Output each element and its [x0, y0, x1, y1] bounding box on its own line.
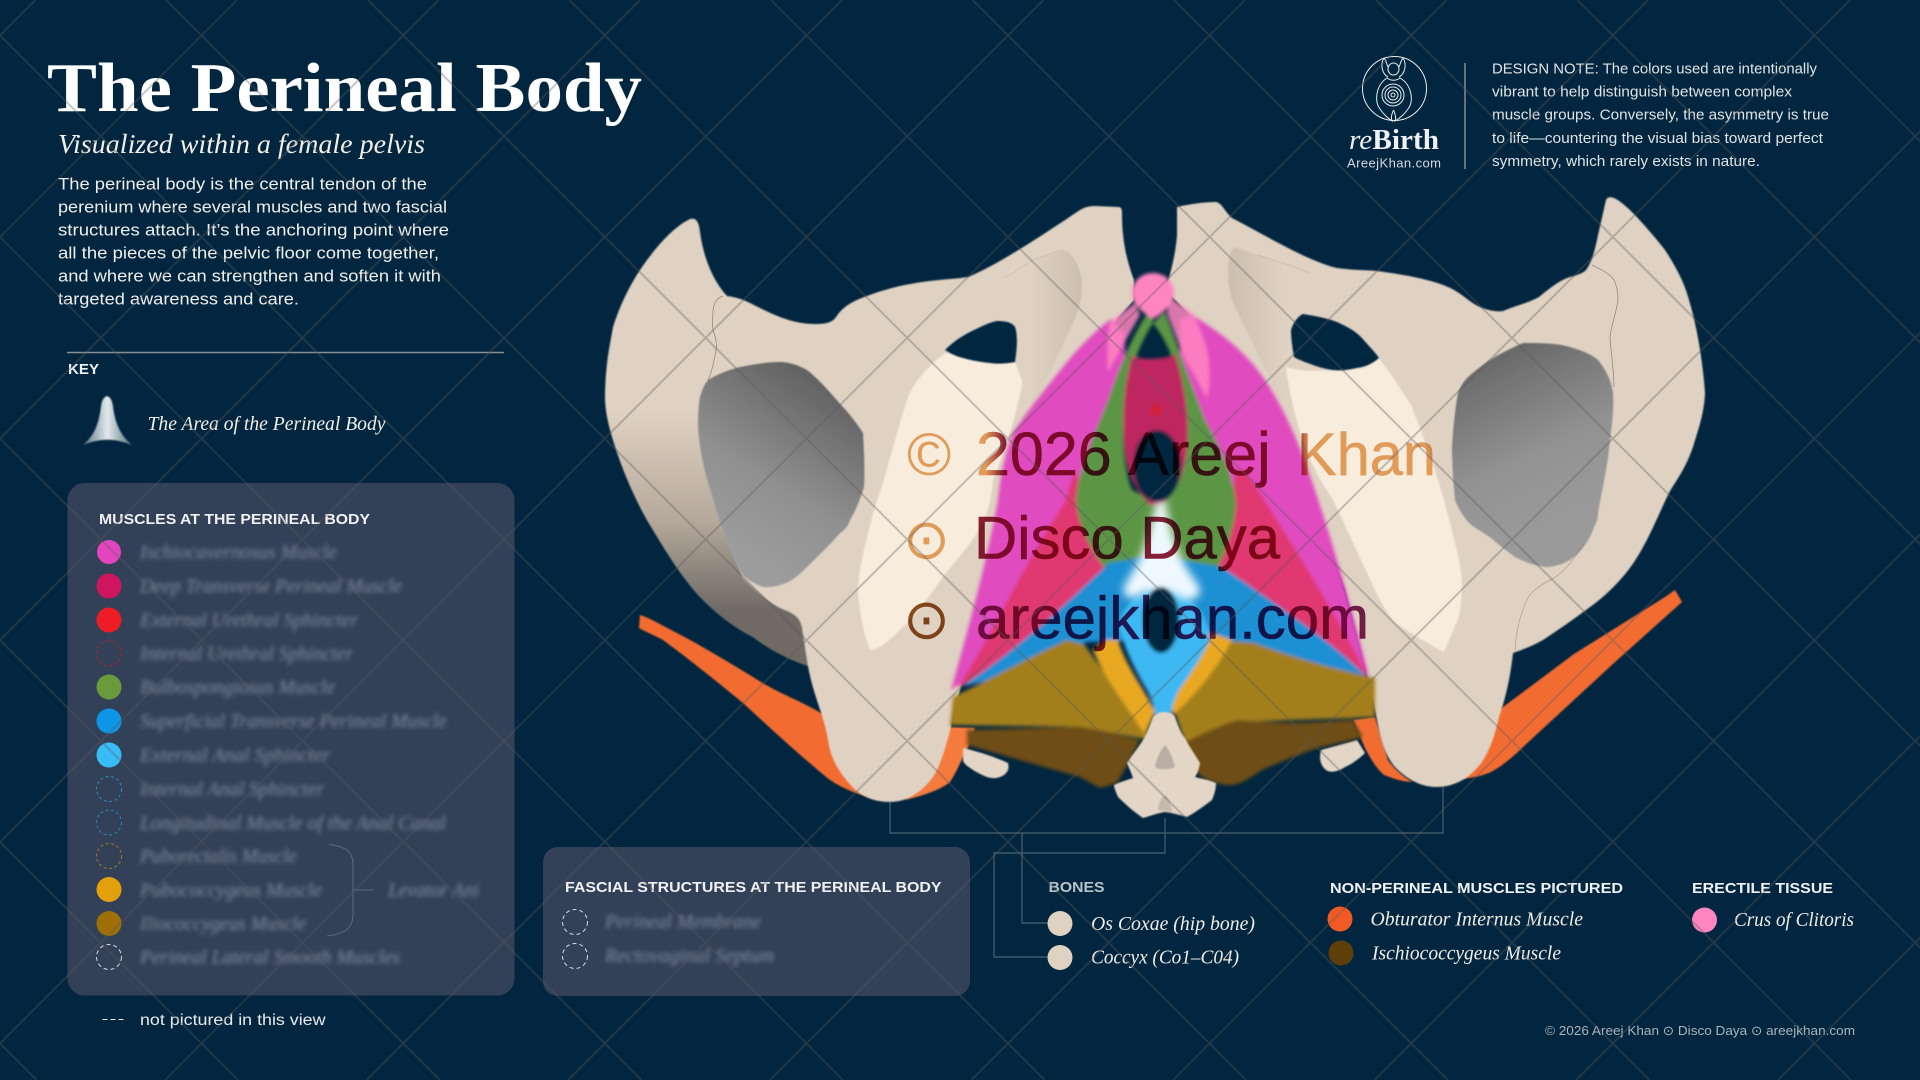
central deep transverse fibres — [1123, 354, 1188, 505]
title: The Perineal Body — [47, 50, 642, 127]
watermark — [903, 420, 1436, 652]
icon: perineal body area — [83, 396, 132, 445]
watermark line 3: ⊙ — [903, 588, 950, 652]
muscle names (obscured): Superficial Transverse Perineal Muscle — [140, 710, 447, 732]
fascial swatches — [562, 910, 588, 968]
muscle names (obscured): Perineal Lateral Smooth Muscles — [139, 946, 400, 968]
watermark line 1: 2026 Areej — [976, 420, 1271, 488]
obturator foramen holes — [945, 314, 1379, 370]
key section — [67, 352, 504, 445]
right ramus shading — [1228, 247, 1310, 440]
muscle names (obscured): Pubococcygeus Muscle — [139, 880, 322, 902]
watermark line 3: areejkhan.com — [976, 584, 1369, 652]
bone: right os coxae — [1165, 197, 1705, 787]
watermark line 1: © — [907, 421, 951, 488]
swatch: crus of clitoris — [1692, 908, 1717, 932]
thin contour lines on bones — [708, 250, 1618, 650]
obturator internus muscle: left — [639, 615, 975, 800]
subtitle: Visualized within a female pelvis — [58, 129, 425, 159]
logo url: AreejKhan.com — [1347, 156, 1441, 170]
intro paragraph: perenium where several muscles and two fascial — [58, 198, 447, 216]
swatch: ischiococcygeus — [1328, 940, 1354, 966]
muscle names: Ischiococcygeus Muscle — [1371, 944, 1561, 964]
iliococcygeus muscle — [950, 640, 1375, 742]
muscle swatches — [96, 540, 122, 970]
muscle names (obscured): Iliococcygeus Muscle — [139, 913, 306, 935]
bulbospongiosus muscle — [1076, 310, 1236, 590]
muscle names (obscured): Puborectalis Muscle — [139, 846, 297, 868]
header divider — [1464, 63, 1466, 169]
intro paragraph: The perineal body is the central tendon of the — [58, 176, 427, 194]
muscle names: Obturator Internus Muscle — [1370, 910, 1583, 930]
muscle names — [1370, 910, 1583, 964]
muscle names (obscured): External Anal Sphincter — [139, 744, 330, 766]
acetabulum: left grey — [698, 362, 864, 587]
muscle names (obscured): Levator Ani — [387, 880, 479, 902]
perineal body glow — [1124, 500, 1199, 599]
not pictured note: not pictured in this view — [140, 1012, 326, 1029]
coccyx — [1114, 712, 1216, 818]
intro paragraph — [58, 176, 449, 308]
panel: fascial structures — [543, 847, 970, 996]
bone names: Os Coxae (hip bone) — [1091, 914, 1255, 935]
design note: vibrant to help distinguish between complex — [1492, 84, 1793, 100]
panel: muscles at the perineal body — [68, 483, 514, 996]
logo wordmark: reBirth — [1349, 124, 1439, 156]
crus of clitoris arms — [1108, 298, 1209, 398]
obturator internus muscle: right — [1353, 590, 1682, 782]
muscle names (obscured): Ischiocavernosus Muscle — [139, 542, 337, 564]
legend: non-perineal muscles: NON-PERINEAL MUSCLES PICTURED — [1330, 880, 1623, 897]
external anal sphincter — [1119, 585, 1210, 716]
logo — [1347, 56, 1441, 170]
urethra — [1150, 404, 1162, 416]
watermark line 1 — [907, 420, 1436, 488]
design note — [1492, 62, 1829, 170]
bone: small ischial spines — [963, 740, 1365, 778]
fascial names (obscured): Perineal Membrane — [604, 911, 761, 933]
vaginal opening — [1133, 430, 1181, 502]
swatch: obturator internus — [1328, 906, 1352, 932]
fascial heading: FASCIAL STRUCTURES AT THE PERINEAL BODY — [565, 879, 942, 896]
pelvis illustration — [605, 197, 1705, 818]
design note: to life—countering the visual bias toward perfect — [1492, 131, 1823, 147]
muscle names (obscured): Bulbospongiosus Muscle — [140, 676, 335, 698]
design note: muscle groups. Conversely, the asymmetry is true — [1492, 108, 1829, 124]
muscle names (obscured): Longitudinal Muscle of the Anal Canal — [139, 812, 446, 834]
key heading: KEY — [68, 361, 99, 378]
anal opening — [1143, 587, 1179, 653]
acetabulum: right grey — [1452, 343, 1613, 567]
bone: light inner rami — [858, 353, 1462, 652]
legend: erectile tissue: ERECTILE TISSUE — [1692, 880, 1833, 897]
deep transverse perineal muscle — [957, 470, 1367, 688]
left wing shading — [605, 393, 808, 666]
logo emblem — [1362, 56, 1426, 121]
levator ani bracket — [327, 844, 374, 936]
design note: symmetry, which rarely exists in nature. — [1492, 154, 1760, 170]
superficial transverse perineal muscle — [962, 555, 1366, 686]
bone: left os coxae — [605, 206, 1134, 802]
pubococcygeus muscle — [1093, 632, 1232, 735]
intro paragraph: and where we can strengthen and soften it with — [58, 268, 441, 286]
tissue name: Crus of Clitoris — [1734, 910, 1854, 931]
legend: bones: BONES — [1048, 879, 1104, 896]
muscle names (obscured) — [139, 542, 479, 968]
panel heading: MUSCLES AT THE PERINEAL BODY — [99, 511, 370, 528]
intro paragraph: all the pieces of the pelvic floor come together, — [58, 244, 439, 262]
left ramus shading — [1000, 250, 1082, 445]
design note: DESIGN NOTE: The colors used are intentionally — [1492, 62, 1818, 78]
bone names — [1091, 914, 1255, 968]
key text: The Area of the Perineal Body — [148, 413, 386, 435]
watermark line 2: ⊙ — [903, 508, 950, 572]
leader lines from bones to legend — [890, 787, 1443, 957]
muscle names (obscured): Internal Urethral Sphincter — [139, 643, 353, 665]
fascial names (obscured) — [604, 911, 774, 967]
muscle names (obscured): Deep Transverse Perineal Muscle — [139, 576, 402, 598]
muscle names (obscured): Internal Anal Sphincter — [139, 778, 324, 800]
fascial names (obscured): Rectovaginal Septum — [604, 945, 774, 967]
muscle names (obscured): External Urethral Sphincter — [139, 610, 358, 632]
intro paragraph: structures attach. It’s the anchoring point where — [58, 222, 449, 240]
copyright footer: © 2026 Areej Khan ⊙ Disco Daya ⊙ areejkhan.com — [1545, 1023, 1855, 1038]
intro paragraph: targeted awareness and care. — [58, 290, 299, 308]
ischiocavernosus muscle — [951, 315, 1369, 690]
muscles at the perineal body — [950, 273, 1375, 788]
bone names: Coccyx (Co1–C04) — [1091, 948, 1239, 968]
ischiococcygeus muscle — [967, 720, 1363, 788]
legend: bones — [1048, 879, 1255, 970]
legend: non-perineal muscles — [1328, 880, 1623, 966]
bone swatches — [1048, 911, 1072, 970]
watermark line 1: Khan — [1297, 421, 1436, 488]
legend: erectile tissue — [1692, 880, 1854, 932]
watermark line 2: Disco Daya — [974, 504, 1281, 572]
crus of clitoris — [1132, 273, 1174, 319]
